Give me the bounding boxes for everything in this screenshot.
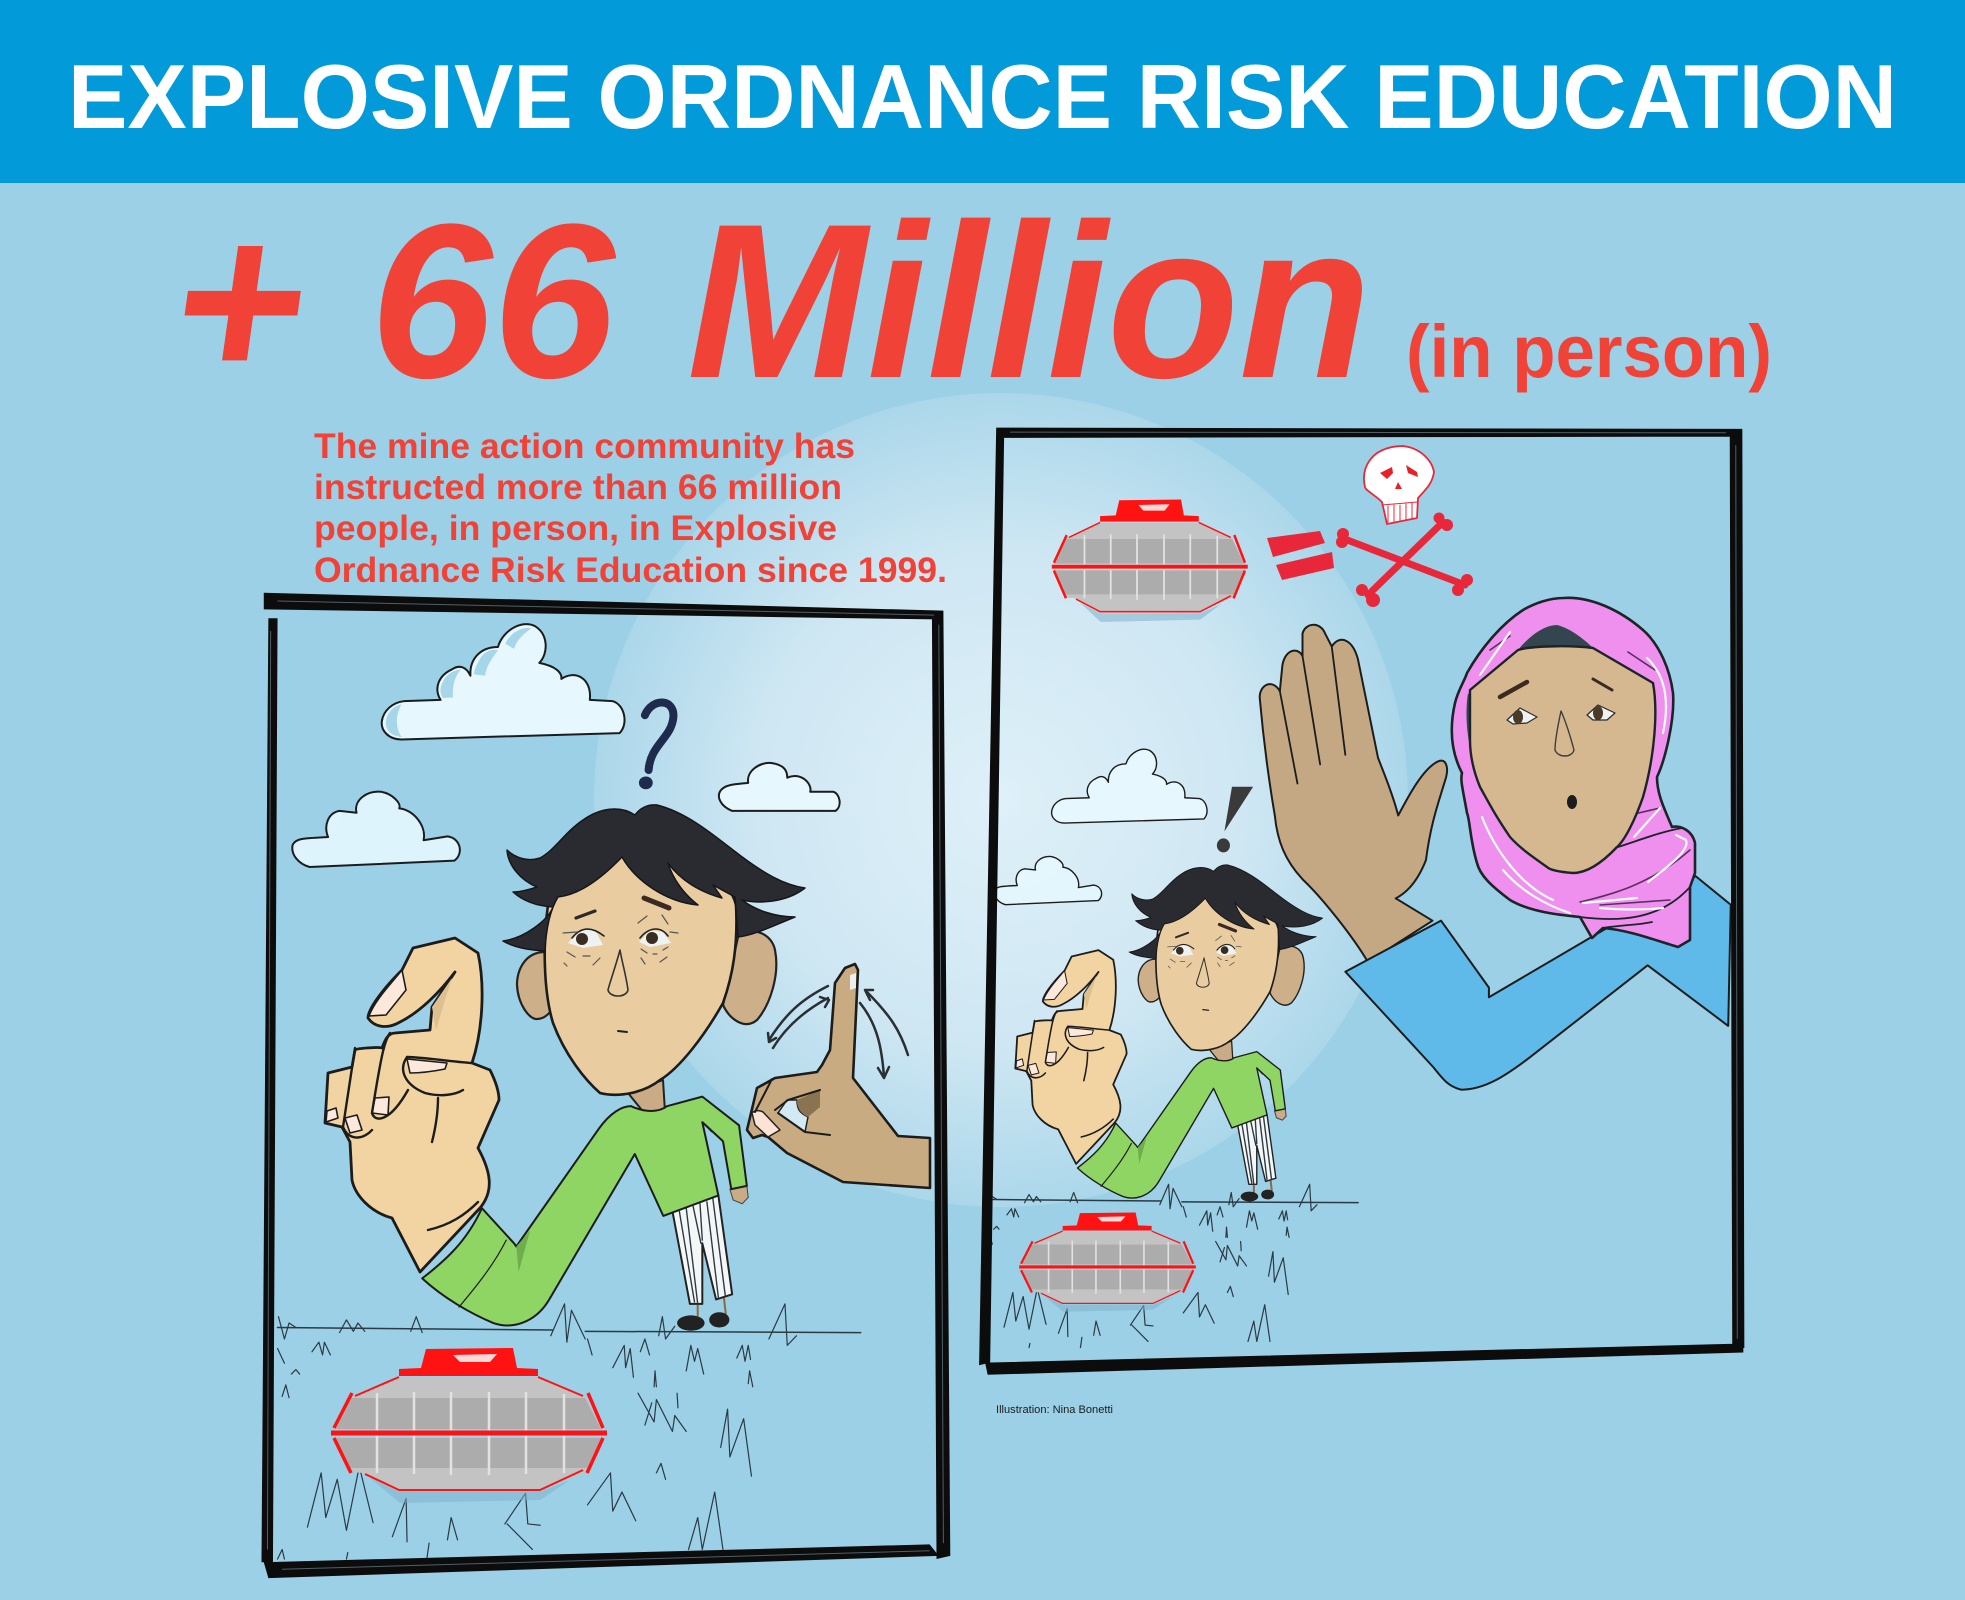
boy face — [545, 849, 736, 1095]
instructor hair — [1466, 625, 1593, 815]
boy neck — [628, 1080, 665, 1114]
boy small-scale — [1015, 865, 1322, 1201]
title: EXPLOSIVE ORDNANCE RISK EDUCATION — [68, 47, 1897, 148]
ground and grass — [278, 1304, 861, 1559]
headline number: Million — [687, 178, 1371, 424]
mine upper — [1052, 500, 1248, 622]
in person qualifier: (in person) — [1406, 310, 1772, 393]
boy figure — [325, 805, 805, 1331]
grass small-scale — [985, 1184, 1358, 1348]
headline number: 66 — [370, 178, 617, 424]
boy legs and shoes — [677, 1298, 729, 1331]
cloud small right — [719, 763, 840, 811]
description paragraph: instructed more than 66 million — [314, 468, 842, 507]
cloud shadows — [296, 628, 531, 864]
description paragraph: people, in person, in Explosive — [314, 509, 837, 548]
header band — [0, 0, 1965, 183]
description paragraph: The mine action community has — [314, 427, 855, 466]
mine lower — [1019, 1213, 1196, 1312]
equals sign — [1267, 531, 1334, 580]
boy ears — [517, 932, 776, 1024]
icon: question mark — [639, 703, 673, 789]
description paragraph — [314, 427, 947, 590]
frame left — [261, 593, 950, 1578]
cloud large small-scale — [1052, 749, 1207, 823]
mine — [331, 1348, 607, 1503]
panel: right illustration — [979, 428, 1744, 1375]
boy striped trousers — [672, 1195, 732, 1304]
headline number: + — [160, 174, 326, 426]
crossed bones — [1336, 512, 1473, 607]
instructor blue sleeve — [1345, 876, 1731, 1090]
illustration credit: Illustration: Nina Bonetti — [996, 1404, 1113, 1416]
panel: left illustration — [278, 624, 930, 1559]
cloud small small-scale — [994, 856, 1102, 905]
arrows showing finger flick — [768, 986, 908, 1078]
icon: exclamation mark — [1217, 787, 1253, 852]
cloud large — [382, 624, 625, 739]
instructor hand demonstrating — [747, 964, 930, 1188]
instructor face — [1470, 646, 1655, 873]
frame right — [979, 428, 1744, 1375]
boy tiny hand — [730, 1186, 748, 1204]
instructor raised hand — [1260, 625, 1447, 962]
background glow circle — [594, 393, 1408, 1207]
skull — [1364, 446, 1434, 524]
boy big hand — [325, 938, 499, 1272]
description paragraph: Ordnance Risk Education since 1999. — [314, 551, 947, 590]
scene repeated small — [985, 749, 1358, 1348]
cloud small left — [292, 792, 460, 867]
boy hair — [503, 805, 805, 951]
headline number — [160, 174, 1371, 426]
boy green sweater — [422, 1097, 747, 1325]
instructor headscarf — [1452, 598, 1695, 947]
